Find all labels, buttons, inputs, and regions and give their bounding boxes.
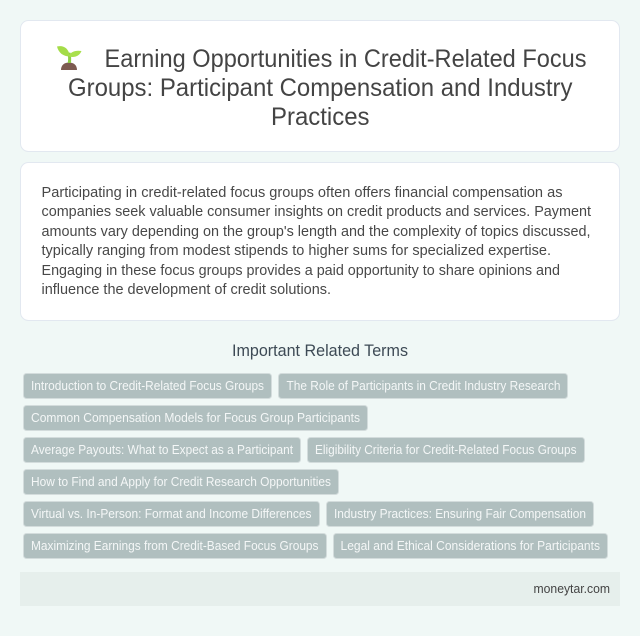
chip: legal and ethical <box>334 534 608 558</box>
chip: find and apply <box>24 470 338 494</box>
description paragraph: Engaging in these focus groups provides a paid opportunity to share opinions and <box>42 262 560 279</box>
chip: industry practices: Industry Practices: Ensuring Fair Compensation <box>334 506 586 521</box>
chip: average payouts <box>24 438 300 462</box>
description paragraph: Participating in credit-related focus groups often offers financial compensation as <box>42 184 562 201</box>
chip: compensation models <box>24 406 368 430</box>
panel: title card <box>20 20 620 152</box>
footer source text: moneytar.com <box>534 582 610 596</box>
chip: legal and ethical: Legal and Ethical Considerations for Participants <box>340 538 600 553</box>
chip: average payouts: Average Payouts: What to Expect as a Participant <box>31 442 293 457</box>
chip: industry practices <box>326 502 594 526</box>
title text: Groups: Participant Compensation and Industry <box>68 74 573 102</box>
chip: role of participants <box>278 374 568 398</box>
chip: virtual vs in-person: Virtual vs. In-Person: Format and Income Differences <box>31 506 312 521</box>
chip: find and apply: How to Find and Apply for Credit Research Opportunities <box>31 474 331 489</box>
description paragraph: amounts vary depending on the group's length and the complexity of topics discussed, <box>42 223 590 240</box>
chip: role of participants: The Role of Participants in Credit Industry Research <box>286 378 560 393</box>
description paragraph: typically ranging from modest stipends to higher sums for specialized expertise. <box>42 242 551 259</box>
title text: Earning Opportunities in Credit-Related Focus <box>104 45 586 73</box>
chip: introduction <box>24 374 272 398</box>
title text <box>68 45 586 131</box>
chip: virtual vs in-person <box>24 502 320 526</box>
description paragraph: companies seek valuable consumer insights on credit products and services. Payment <box>42 203 592 220</box>
title text: Practices <box>271 103 370 131</box>
chip: eligibility criteria: Eligibility Criteria for Credit-Related Focus Groups <box>315 442 576 457</box>
chip: maximizing earnings: Maximizing Earnings from Credit-Based Focus Groups <box>31 538 318 553</box>
chip: compensation models: Common Compensation Models for Focus Group Participants <box>31 410 360 425</box>
heading: important related terms: Important Related Terms <box>232 342 408 360</box>
panel: related term chips <box>24 374 608 558</box>
chip: maximizing earnings <box>24 534 326 558</box>
description paragraph <box>42 184 592 298</box>
description paragraph: influence the development of credit solutions. <box>42 281 331 298</box>
chip: introduction: Introduction to Credit-Related Focus Groups <box>31 378 264 393</box>
chip: eligibility criteria <box>308 438 584 462</box>
panel: description card <box>20 162 620 320</box>
footer bar <box>20 572 620 606</box>
icon: seedling <box>57 46 82 70</box>
